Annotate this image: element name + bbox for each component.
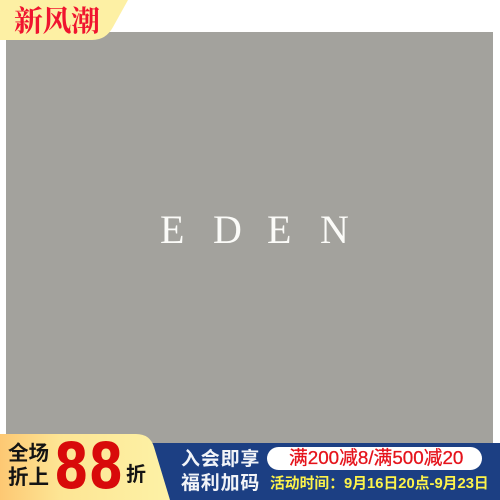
heading: 新风潮: 新风潮 xyxy=(14,0,100,40)
text: 福利加码: 福利加码 xyxy=(181,473,260,494)
text: 全场折上: 全场折上 xyxy=(8,442,49,489)
title: EDEN: E xyxy=(267,207,291,252)
title: EDEN: N xyxy=(320,207,349,252)
text: coupon offer: 满200减8/满500减20 xyxy=(289,447,463,468)
text: 折: 折 xyxy=(126,464,146,486)
text: activity dates: 活动时间：9月16日20点-9月23日 xyxy=(270,476,489,492)
title: EDEN: E xyxy=(160,207,184,252)
panel: yellow discount tag xyxy=(0,434,170,500)
pill: coupon offer xyxy=(267,447,482,470)
title: EDEN: D xyxy=(213,207,242,252)
title: EDEN xyxy=(160,207,349,252)
badge: top left yellow tag xyxy=(0,0,128,40)
text: 入会即享: 入会即享 xyxy=(181,449,260,470)
banner: blue membership strip xyxy=(150,443,500,500)
